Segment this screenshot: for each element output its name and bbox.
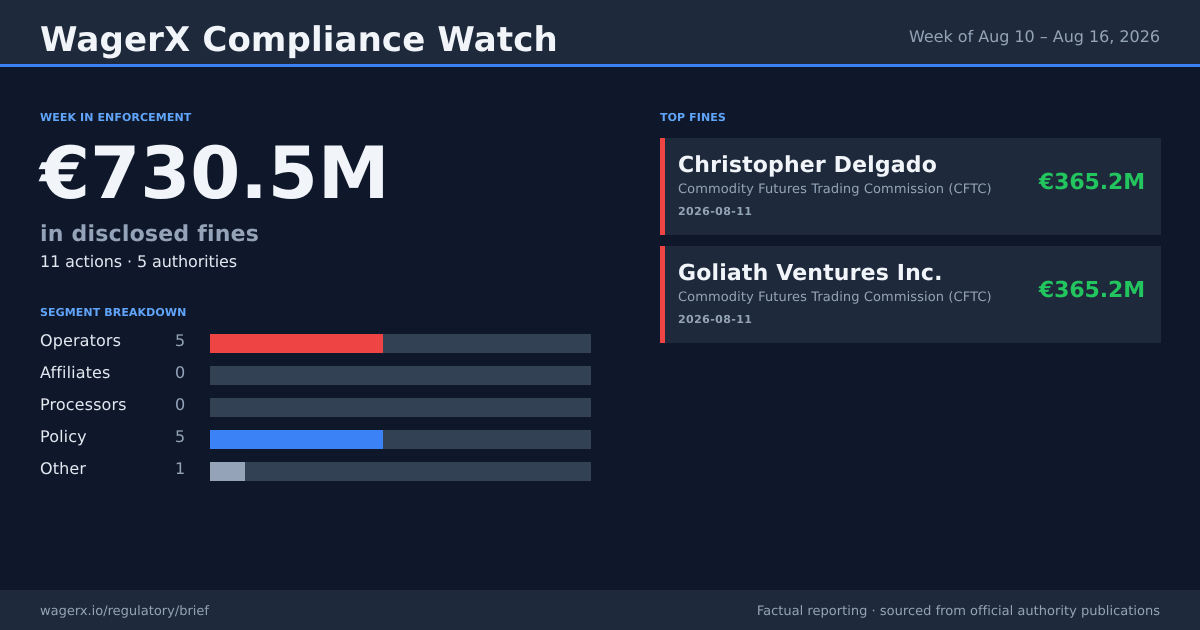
row: other: 1: [175, 459, 185, 478]
panel: fine card Christopher Delgado: 2026-08-11: [678, 205, 752, 218]
panel: fine card Christopher Delgado: €365.2M: [1039, 170, 1145, 195]
title: WagerX Compliance Watch: [40, 20, 558, 60]
row: other: Other: [40, 459, 86, 478]
date range: Week of Aug 10 – Aug 16, 2026: [909, 27, 1160, 46]
footer band: [0, 590, 1200, 630]
headline total: €730.5M: [40, 131, 390, 215]
panel: fine card Goliath Ventures Inc.: 2026-08-11: [678, 313, 752, 326]
row: affiliates: 0: [175, 363, 185, 382]
row: operators: 5: [175, 331, 185, 350]
row: policy: [40, 427, 591, 449]
panel: fine card Christopher Delgado: Christopher Delgado: [678, 153, 937, 178]
panel: fine card Christopher Delgado: [660, 138, 1161, 235]
row: processors: 0: [175, 395, 185, 414]
row: operators: [40, 331, 591, 353]
action counts: 11 actions · 5 authorities: [40, 252, 237, 271]
heading: top fines: TOP FINES: [660, 111, 726, 124]
panel: fine card Goliath Ventures Inc.: Commodity Futures Trading Commission (CFTC): [678, 290, 992, 305]
row: other: [40, 459, 591, 481]
header band: [0, 0, 1200, 67]
heading: segment breakdown: SEGMENT BREAKDOWN: [40, 306, 186, 319]
row: policy: 5: [175, 427, 185, 446]
row: operators: Operators: [40, 331, 121, 350]
panel: fine card Christopher Delgado: Commodity Futures Trading Commission (CFTC): [678, 182, 992, 197]
heading: week in enforcement: WEEK IN ENFORCEMENT: [40, 111, 191, 124]
row: affiliates: Affiliates: [40, 363, 110, 382]
row: policy: Policy: [40, 427, 87, 446]
header accent line: [0, 64, 1200, 67]
row: affiliates: [40, 363, 591, 385]
panel: fine card Goliath Ventures Inc.: Goliath Ventures Inc.: [678, 261, 943, 286]
row: processors: [40, 395, 591, 417]
headline caption: in disclosed fines: [40, 222, 259, 247]
panel: fine card Goliath Ventures Inc.: [660, 246, 1161, 343]
row: processors: Processors: [40, 395, 127, 414]
bar chart: segments: [40, 331, 591, 481]
panel: fine card Goliath Ventures Inc.: €365.2M: [1039, 278, 1145, 303]
footer url: wagerx.io/regulatory/brief: [40, 604, 209, 619]
footer note: Factual reporting · sourced from official authority publications: [757, 604, 1160, 619]
